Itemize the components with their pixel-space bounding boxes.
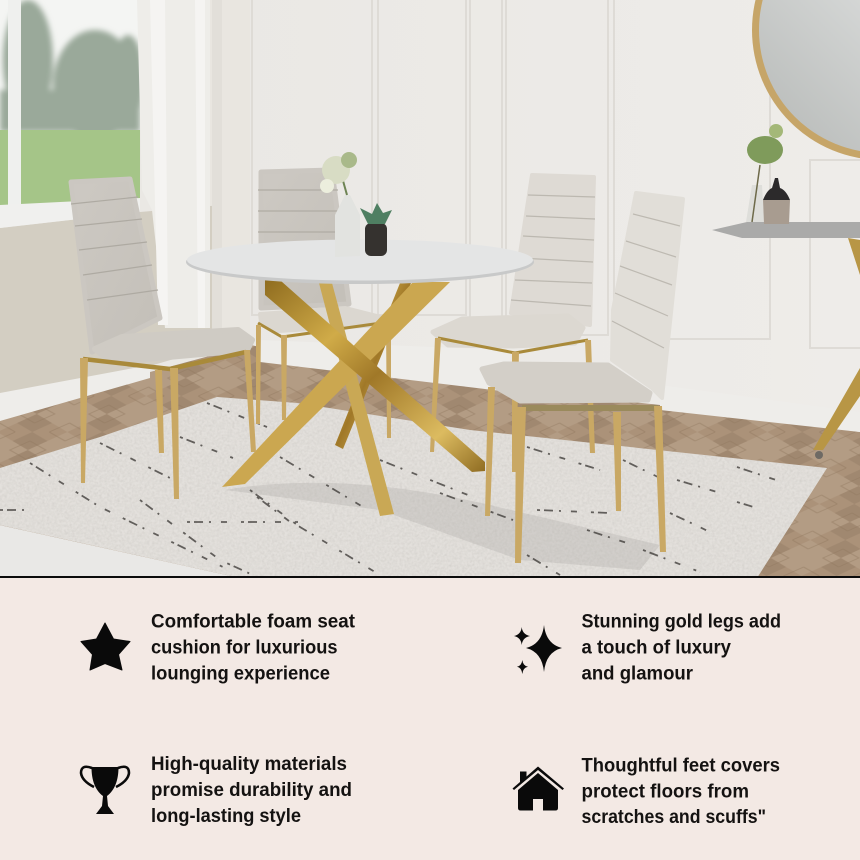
chair: front right xyxy=(482,193,683,563)
wooden floor xyxy=(0,345,860,576)
feature: feet covers xyxy=(512,756,780,828)
text: feet covers xyxy=(582,756,780,828)
feature: materials xyxy=(81,754,352,827)
rug xyxy=(0,397,827,578)
icon: star xyxy=(81,623,130,670)
diagonal leg to lower right xyxy=(265,280,485,472)
text: foam seat: cushion for luxurious xyxy=(151,638,338,658)
text: foam seat xyxy=(151,612,356,684)
left wall xyxy=(0,205,222,395)
text: gold legs xyxy=(582,612,781,684)
text: gold legs: a touch of luxury xyxy=(582,638,731,658)
console decor xyxy=(746,124,790,224)
feature: gold legs xyxy=(514,612,781,684)
rear leg xyxy=(335,283,411,449)
text: foam seat: Comfortable foam seat xyxy=(151,612,356,632)
table top xyxy=(186,240,534,284)
chair: back right xyxy=(430,175,595,472)
text: materials: High-quality materials xyxy=(151,754,347,775)
centre leg xyxy=(319,283,394,516)
text: feet covers: Thoughtful feet covers xyxy=(582,756,780,776)
icon: house xyxy=(512,766,564,810)
text: materials xyxy=(151,754,352,827)
back wall with panel mouldings xyxy=(140,0,860,372)
chair: front left xyxy=(71,179,256,499)
text: materials: long-lasting style xyxy=(151,806,301,827)
table vase and plants xyxy=(320,152,392,257)
text: feet covers: scratches and scuffs" xyxy=(582,807,766,828)
feature: foam seat xyxy=(81,612,356,684)
skirting boards xyxy=(0,340,860,432)
text: gold legs: Stunning gold legs add xyxy=(582,612,781,632)
diagonal leg to lower left xyxy=(222,282,450,487)
photo: dining room scene xyxy=(0,0,860,578)
divider line under photo xyxy=(0,576,860,578)
chair: back left xyxy=(256,170,391,438)
panel: features xyxy=(81,612,781,828)
window with garden view xyxy=(0,0,144,228)
text: gold legs: and glamour xyxy=(582,664,694,684)
icon: trophy xyxy=(81,767,129,814)
icon: sparkles xyxy=(514,625,562,674)
mirror xyxy=(752,0,860,160)
text: feet covers: protect floors from xyxy=(582,782,749,802)
table legs xyxy=(222,280,485,516)
console table xyxy=(712,222,860,459)
text: materials: promise durability and xyxy=(151,780,352,801)
text: foam seat: lounging experience xyxy=(151,664,330,684)
curtain xyxy=(137,0,222,335)
